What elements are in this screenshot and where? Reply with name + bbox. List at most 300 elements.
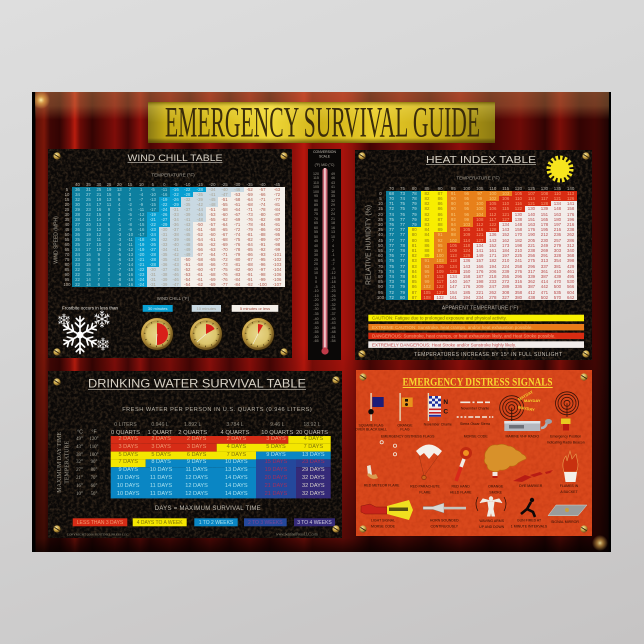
wind chill data table: -73 bbox=[221, 262, 228, 267]
wind chill data table: 8 bbox=[98, 267, 100, 272]
wind chill data table: -34 bbox=[209, 187, 215, 192]
wind chill data table: -4 bbox=[128, 207, 132, 212]
conversion scale celsius numbers: -40 bbox=[330, 316, 336, 320]
conversion scale celsius numbers: 29 bbox=[331, 203, 335, 207]
heat index data table: 70 bbox=[378, 264, 383, 269]
column headers: temperature units bbox=[77, 430, 97, 436]
heat index data table: 99 bbox=[477, 196, 482, 201]
column headers: quarts: 10 QUARTS bbox=[261, 430, 293, 436]
water survival data table: 80° bbox=[91, 468, 97, 473]
heat index data table: 127 bbox=[436, 290, 444, 295]
heat index data table: 178 bbox=[541, 222, 548, 227]
labels: top row: MARINE VHF RADIO bbox=[505, 434, 539, 438]
wind chill data table: -37 bbox=[161, 267, 167, 272]
icon: november charlie flags: C bbox=[443, 408, 448, 416]
icon: november charlie flags: N bbox=[443, 399, 448, 406]
wind chill data table: -16 bbox=[138, 227, 144, 232]
conversion scale fahrenheit numbers bbox=[313, 172, 319, 343]
wind chill data table: 4 bbox=[108, 237, 110, 242]
column headers: quarts: 0 QUARTS bbox=[111, 430, 140, 436]
wind chill data table: -35 bbox=[161, 252, 167, 257]
heat index data table: 209 bbox=[476, 284, 483, 289]
heat index data table: 194 bbox=[489, 264, 496, 269]
wind chill data table: -84 bbox=[234, 282, 240, 287]
wind chill data table: -77 bbox=[274, 197, 280, 202]
wind chill data table: -49 bbox=[184, 252, 190, 257]
wind chill data table: -59 bbox=[247, 192, 253, 197]
water survival data table: 12 DAYS bbox=[185, 475, 208, 481]
water survival data table: 2 DAYS bbox=[151, 436, 171, 442]
water survival data table: 20 DAYS bbox=[265, 475, 287, 481]
wind chill data table: -67 bbox=[209, 267, 215, 272]
wind chill data table: -25 bbox=[221, 182, 228, 187]
heat index data table: 96 bbox=[464, 212, 469, 217]
labels: bottom row: GUN FIRED AT bbox=[517, 519, 542, 523]
wind chill data table: -61 bbox=[234, 202, 240, 207]
wind chill data table: 1 bbox=[140, 187, 142, 192]
wind chill data table: -4 bbox=[139, 192, 143, 197]
water survival data table: 43° bbox=[76, 445, 83, 450]
heat index data table: 197 bbox=[554, 222, 561, 227]
heat index data table: 121 bbox=[476, 232, 483, 237]
labels: top row: ORANGE bbox=[397, 424, 413, 428]
wind chill data table: -95 bbox=[259, 257, 266, 262]
water survival data table: 10 DAYS bbox=[117, 483, 139, 489]
icon: red hand held flare bbox=[456, 447, 472, 481]
conversion scale fahrenheit numbers: -55 bbox=[313, 330, 319, 334]
conversion scale fahrenheit numbers: -20 bbox=[313, 298, 319, 302]
heat index data table: 238 bbox=[567, 227, 574, 232]
wind chill data table: -10 bbox=[127, 232, 133, 237]
conversion scale fahrenheit numbers: -25 bbox=[313, 303, 319, 307]
column headers: liters: 18.92 L bbox=[303, 422, 321, 428]
heat index data table: 106 bbox=[436, 264, 444, 269]
heat index data table: 278 bbox=[489, 295, 496, 300]
legend: 30 minutes: 30 minutes bbox=[148, 306, 167, 311]
heat index data table: 35 bbox=[378, 227, 383, 232]
wind chill data table: -23 bbox=[138, 272, 144, 277]
wind chill data table: -13 bbox=[127, 257, 133, 262]
wind chill data table: -52 bbox=[184, 267, 190, 272]
wind chill data table: 65 bbox=[65, 247, 69, 252]
heat index data table: 158 bbox=[463, 274, 470, 279]
heat index data table: 167 bbox=[463, 279, 470, 284]
wind chill data table: -45 bbox=[274, 182, 280, 187]
wind chill data table: 19 bbox=[96, 197, 101, 202]
wind chill data table: -62 bbox=[197, 282, 203, 287]
wind chill data table: -15 bbox=[197, 182, 203, 187]
heat index data table: 317 bbox=[528, 269, 535, 274]
conversion scale fahrenheit numbers: -30 bbox=[313, 307, 319, 311]
heat index data table: 495 bbox=[567, 274, 574, 279]
wind chill data table: -28 bbox=[197, 187, 203, 192]
conversion scale fahrenheit numbers: -60 bbox=[313, 335, 319, 339]
wind chill data table: -64 bbox=[247, 197, 253, 202]
heat index data table: 238 bbox=[528, 248, 535, 253]
wind chill data table: -8 bbox=[117, 277, 121, 282]
heat index data table: 25 bbox=[378, 217, 383, 222]
wind chill data table: 28 bbox=[75, 217, 80, 222]
heat index data table: 82 bbox=[425, 206, 429, 211]
heat index data table: 216 bbox=[554, 227, 561, 232]
water survival data table: 32 DAYS bbox=[302, 483, 325, 489]
labels: top row: Sierra Oscar Sierra bbox=[460, 422, 490, 426]
conversion scale fahrenheit numbers: -40 bbox=[313, 316, 319, 320]
heat index data table: 100 bbox=[476, 206, 483, 211]
heat index data table: 140 bbox=[528, 212, 535, 217]
wind chill data table: 25 bbox=[75, 242, 80, 247]
legend: 4 days to a week: 4 DAYS TO A WEEK bbox=[137, 520, 183, 526]
icon: red meteor flare bbox=[367, 441, 397, 479]
wind chill data table: -1 bbox=[117, 222, 121, 227]
wind chill data table: -16 bbox=[127, 282, 133, 287]
heat index data table: 566 bbox=[567, 284, 574, 289]
wind chill data table: 23 bbox=[75, 257, 80, 262]
wind chill data table: -14 bbox=[127, 262, 133, 267]
water survival data table: 3 DAYS bbox=[187, 444, 206, 450]
panel: wind chill table bbox=[48, 149, 292, 358]
conversion scale celsius numbers: -51 bbox=[330, 335, 336, 339]
wind chill data table: -16 bbox=[161, 192, 167, 197]
heat index data table: 358 bbox=[515, 290, 522, 295]
wind chill data table: -7 bbox=[139, 197, 143, 202]
wind chill data table: -54 bbox=[184, 277, 190, 282]
wind chill data table: -93 bbox=[259, 252, 266, 257]
wind chill data table: -55 bbox=[221, 202, 228, 207]
wind chill data table: -107 bbox=[273, 282, 281, 287]
heat index data table: 86 bbox=[412, 284, 417, 289]
wind chill data table: -36 bbox=[172, 222, 179, 227]
wind chill data table: 55 bbox=[65, 237, 69, 242]
wind chill data table: -62 bbox=[221, 217, 228, 222]
wind chill data table: -57 bbox=[259, 187, 266, 192]
heat index data table: 91 bbox=[425, 258, 429, 263]
wind chill data table: -58 bbox=[197, 257, 203, 262]
heat index data table: 414 bbox=[541, 279, 548, 284]
heat index data table: 308 bbox=[502, 290, 509, 295]
axis label: maximum day time temperature: MAXIMUM DAY TIME bbox=[57, 432, 63, 493]
wind chill data table: 23 bbox=[86, 207, 91, 212]
heat index data table: 122 bbox=[515, 206, 522, 211]
wind chill data table: 30 bbox=[65, 212, 69, 217]
labels: top row: MORSE CODE bbox=[464, 434, 488, 438]
wind chill data table: -15 bbox=[150, 202, 156, 207]
icon: square flag over black ball bbox=[368, 393, 384, 421]
wind chill data table: -39 bbox=[161, 282, 167, 287]
heat index data table: 125 bbox=[528, 186, 535, 190]
icon: flames in a bucket bbox=[563, 451, 578, 482]
water survival data table: 10 DAYS bbox=[117, 491, 139, 497]
wind chill data table: 8 bbox=[98, 262, 100, 267]
heat index data table: 79 bbox=[412, 222, 417, 227]
legend: 10 minutes bbox=[192, 305, 221, 312]
heat index data table: 78 bbox=[400, 274, 405, 279]
heat index data table: 121 bbox=[554, 196, 561, 201]
wind chill data table: -76 bbox=[221, 272, 228, 277]
heat index data table: 84 bbox=[412, 274, 417, 279]
water survival data table: 38° bbox=[76, 453, 83, 458]
heat index data table: 77 bbox=[400, 264, 405, 269]
wind chill data table: -51 bbox=[221, 197, 228, 202]
heat index data table: 196 bbox=[567, 217, 574, 222]
heat index data table: 296 bbox=[528, 264, 535, 269]
heat index data table: 212 bbox=[541, 232, 548, 237]
water survival data table: 2 DAYS bbox=[227, 436, 246, 442]
wind chill data table: -91 bbox=[274, 222, 280, 227]
heat index data table: 92 bbox=[438, 238, 443, 243]
wind chill data table: -58 bbox=[221, 207, 228, 212]
heat index data table: 134 bbox=[450, 274, 457, 279]
heat index data table: 129 bbox=[463, 253, 470, 258]
wind chill data table: -35 bbox=[184, 202, 190, 207]
conversion scale fahrenheit numbers: 40 bbox=[314, 244, 318, 248]
wind chill data table: -26 bbox=[150, 242, 156, 247]
wind chill data table: 30 bbox=[75, 202, 80, 207]
wind chill data table: -19 bbox=[150, 212, 156, 217]
wind chill data table: 3 bbox=[118, 207, 120, 212]
conversion scale fahrenheit numbers: 95 bbox=[314, 194, 318, 198]
wind chill data table: -58 bbox=[197, 262, 203, 267]
heading: emergency distress signals: EMERGENCY DISTRESS SIGNALS bbox=[402, 374, 553, 388]
heat index data table: 109 bbox=[463, 232, 470, 237]
heat index data table: 80 bbox=[400, 295, 405, 300]
heat index data table: 535 bbox=[554, 290, 561, 295]
heat index data table: 130 bbox=[541, 186, 548, 190]
heat index data table: 143 bbox=[463, 264, 470, 269]
wind chill data table: -56 bbox=[197, 247, 203, 252]
wind chill data table: -58 bbox=[209, 227, 215, 232]
heat index data table: 15 bbox=[378, 206, 383, 211]
wind chill data table: 40 bbox=[75, 182, 80, 187]
heat index data table: 289 bbox=[502, 284, 509, 289]
conversion scale fahrenheit numbers: 50 bbox=[314, 235, 318, 239]
wind chill data table: 14 bbox=[96, 217, 101, 222]
wind chill data table: 36 bbox=[75, 187, 80, 192]
wind chill data table: -65 bbox=[221, 227, 228, 232]
wind chill data table: -46 bbox=[172, 277, 179, 282]
heat index data table: 84 bbox=[425, 227, 429, 232]
wind chill data table: -48 bbox=[184, 242, 190, 247]
wind chill data table: -18 bbox=[138, 237, 144, 242]
heat index data table: 107 bbox=[528, 191, 535, 196]
icon: dye marker bbox=[513, 470, 553, 482]
labels: bottom row: WAVING ARMS bbox=[479, 519, 505, 523]
water survival data table: 2 DAYS bbox=[118, 436, 138, 442]
labels: top row: EMERGENCY DISTRESS FLAGS bbox=[381, 434, 435, 438]
heat index data table: 95 bbox=[425, 269, 429, 274]
wind chill data table: -61 bbox=[209, 237, 215, 242]
heat index data table: 50 bbox=[378, 243, 383, 248]
heat index data table: 182 bbox=[515, 238, 522, 243]
water survival data table: 110° bbox=[90, 445, 98, 450]
wind chill data table: -31 bbox=[150, 277, 156, 282]
wind chill data table: -22 bbox=[161, 202, 167, 207]
wind chill data table: 15 bbox=[86, 272, 91, 277]
panel: emergency distress signals bbox=[355, 370, 592, 536]
wind chill data table: -19 bbox=[138, 242, 144, 247]
heat index data table: 187 bbox=[476, 274, 483, 279]
wind chill data table: -11 bbox=[161, 187, 167, 192]
wind chill data table: 1 bbox=[108, 277, 110, 282]
wind chill data table: -63 bbox=[209, 247, 215, 252]
heat index data table: 134 bbox=[502, 222, 509, 227]
labels: bottom row: SIGNAL MIRROR bbox=[551, 520, 579, 524]
wind chill data table: -84 bbox=[234, 277, 240, 282]
heat index data table: 412 bbox=[528, 290, 535, 295]
wind chill data table: -28 bbox=[150, 252, 156, 257]
heat index data table: 234 bbox=[476, 295, 483, 300]
water survival data table: 21° bbox=[76, 476, 83, 481]
heat index data table: 95 bbox=[378, 290, 383, 295]
heading: conversion scale bbox=[313, 150, 336, 158]
icon: light signal flashlight bbox=[361, 500, 413, 520]
heat index data table: 87 bbox=[412, 290, 417, 295]
wind chill data table: -52 bbox=[197, 232, 203, 237]
heat index data table: 55 bbox=[378, 248, 383, 253]
water survival data table: 7 DAYS bbox=[304, 444, 323, 450]
wind chill data table: -66 bbox=[209, 262, 215, 267]
legend: less than 3 days: LESS THAN 3 DAYS bbox=[77, 520, 124, 526]
heat index data table: 361 bbox=[541, 269, 548, 274]
wind chill data table: -21 bbox=[138, 262, 144, 267]
wind chill data table: -3 bbox=[117, 237, 121, 242]
wind chill data table: -28 bbox=[184, 192, 190, 197]
heat index data table: 113 bbox=[450, 253, 457, 258]
conversion scale fahrenheit numbers: 90 bbox=[314, 199, 318, 203]
heat index data table: 82 bbox=[425, 191, 429, 196]
wind chill data table: -17 bbox=[138, 232, 144, 237]
heat index data table: 76 bbox=[389, 222, 394, 227]
labels: bottom row: MORSE CODE bbox=[371, 525, 396, 529]
conversion scale celsius numbers: -32 bbox=[330, 303, 336, 307]
wind chill data table: -97 bbox=[274, 237, 280, 242]
wind chill data table: 90 bbox=[65, 272, 69, 277]
water survival data table: 3 DAYS bbox=[266, 436, 286, 442]
heat index data table: 236 bbox=[554, 232, 561, 237]
wind chill data table: -47 bbox=[172, 282, 179, 287]
heat index data table: 105 bbox=[489, 201, 496, 206]
wind chill data table: -78 bbox=[247, 222, 253, 227]
wind chill data table: -5 bbox=[128, 212, 132, 217]
legend: 30 minutes bbox=[143, 305, 173, 312]
wind chill data table: 15 bbox=[96, 212, 101, 217]
labels: top row: Indicating Radio Beacon bbox=[547, 440, 585, 444]
wind chill data table: -69 bbox=[234, 217, 240, 222]
wind chill data table: -62 bbox=[209, 242, 215, 247]
heat index data table: 45 bbox=[378, 238, 383, 243]
wind chill data table: 15 bbox=[86, 262, 91, 267]
conversion scale celsius numbers: 10 bbox=[331, 235, 335, 239]
wind chill data table: -34 bbox=[161, 247, 167, 252]
wind chill data table: 15 bbox=[86, 267, 91, 272]
heat index data table: 86 bbox=[425, 243, 429, 248]
legend: 4 days to a week bbox=[133, 518, 187, 526]
wind chill data table: 25 bbox=[65, 207, 69, 212]
labels: middle row: HELD FLARE bbox=[450, 490, 472, 494]
heat index data table: 90 bbox=[378, 284, 383, 289]
legend: 1 to 2 weeks: 1 TO 2 WEEKS bbox=[199, 520, 234, 526]
heat index data table: 340 bbox=[567, 248, 574, 253]
heat index data table: 327 bbox=[502, 295, 509, 300]
wind chill data table: -93 bbox=[274, 227, 280, 232]
water survival data table: 21 DAYS bbox=[265, 483, 287, 489]
heat index data table: 127 bbox=[502, 217, 509, 222]
wind chill data table: -74 bbox=[234, 232, 240, 237]
heat index data table: 152 bbox=[489, 243, 496, 248]
heat index data table: 100 bbox=[489, 191, 496, 196]
heat index data table: 262 bbox=[489, 290, 496, 295]
conversion scale celsius numbers: -34 bbox=[330, 307, 336, 311]
wind chill data table: -21 bbox=[138, 257, 144, 262]
wind chill data table: 12 bbox=[96, 232, 101, 237]
heat index data table: 91 bbox=[438, 232, 443, 237]
wind chill data table: -45 bbox=[209, 197, 215, 202]
heat index data table: 75 bbox=[400, 201, 405, 206]
heat index data table: 78 bbox=[400, 248, 405, 253]
heat index data table: 296 bbox=[515, 274, 522, 279]
wind chill data table: -49 bbox=[184, 247, 190, 252]
wind chill data table: -24 bbox=[150, 232, 156, 237]
heat index data table: 97 bbox=[438, 248, 443, 253]
icon: november charlie flags bbox=[428, 393, 448, 421]
wind chill data table: -64 bbox=[221, 222, 228, 227]
labels: middle row: RED METEOR FLARE bbox=[364, 484, 400, 488]
wind chill data table: -53 bbox=[209, 212, 215, 217]
water survival data table: 70° bbox=[91, 476, 97, 481]
heat index data table bbox=[377, 186, 577, 300]
legend: dangerous: DANGEROUS: Sunstroke, heat cramps, or heat exhaustion likely, and Heat Stroke possible. bbox=[372, 334, 556, 339]
wind chill data table: -63 bbox=[274, 187, 280, 192]
conversion scale fahrenheit numbers: 65 bbox=[314, 221, 318, 225]
heat index data table: 75 bbox=[389, 258, 394, 263]
wind chill data table: 25 bbox=[96, 187, 101, 192]
wind chill data table: 19 bbox=[86, 232, 91, 237]
wind chill data table: -37 bbox=[172, 227, 179, 232]
heat index data table: 103 bbox=[502, 191, 509, 196]
wind chill data table: -82 bbox=[259, 217, 266, 222]
wind chill data table: -30 bbox=[161, 227, 167, 232]
heat index data table: 87 bbox=[412, 295, 417, 300]
labels: middle row: DYE MARKER bbox=[519, 484, 543, 488]
icon: gun fired kneeling figure bbox=[521, 498, 535, 517]
water survival data table: 14 DAYS bbox=[225, 491, 248, 497]
wind chill data table: 22 bbox=[75, 267, 80, 272]
heat index data table: 197 bbox=[502, 253, 509, 258]
labels: middle row: SMOKE bbox=[489, 490, 503, 494]
wind chill data table: -76 bbox=[247, 217, 253, 222]
wind chill data table: -80 bbox=[234, 257, 240, 262]
wind chill data table: -81 bbox=[274, 202, 280, 207]
heat index data table: 224 bbox=[502, 264, 509, 269]
water survival data table: 120° bbox=[89, 437, 99, 442]
wind chill data table: 20 bbox=[117, 182, 122, 187]
heat index data table: 80 bbox=[412, 232, 417, 237]
heat index data table: 75 bbox=[400, 206, 405, 211]
heat index data table: 103 bbox=[463, 222, 470, 227]
heat index data table: 247 bbox=[489, 284, 496, 289]
heat index data table: 89 bbox=[425, 253, 429, 258]
water survival data table: 5 DAYS bbox=[151, 452, 171, 458]
heat index data table: 96 bbox=[464, 191, 469, 196]
heat index data table: 75 bbox=[389, 217, 394, 222]
conversion scale fahrenheit numbers: 20 bbox=[314, 262, 318, 266]
wind chill data table: 20 bbox=[65, 202, 69, 207]
heat index data table: 138 bbox=[515, 217, 522, 222]
heat index data table: 109 bbox=[436, 269, 444, 274]
wind chill data table: 20 bbox=[86, 222, 91, 227]
heat index data table: 380 bbox=[515, 295, 522, 300]
wind chill data table: 0 bbox=[118, 217, 120, 222]
